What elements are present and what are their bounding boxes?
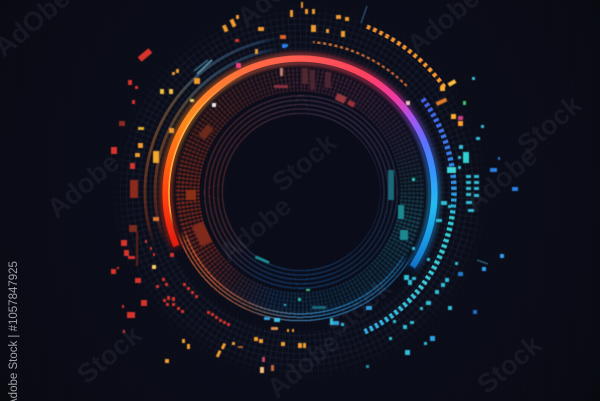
cool particles on the right [255, 44, 518, 368]
orange dashed arc outer [365, 24, 446, 88]
watermark: Adobe Stock repeated: Stock [321, 273, 397, 343]
inner dark disc [226, 115, 380, 269]
watermark: Adobe Stock repeated: Adobe [213, 191, 297, 268]
orange dashed arc inner [312, 40, 408, 88]
thin bottom rings [178, 230, 411, 322]
watermark: Adobe Stock repeated: Stock [511, 90, 587, 160]
segmented data band [172, 64, 428, 320]
ring inner highlight [168, 76, 243, 226]
blue and cyan segmented bars [362, 96, 457, 335]
outer grid ring [120, 12, 480, 372]
highlight glints [190, 6, 488, 264]
inner concentric thin rings [204, 94, 398, 290]
watermark: Adobe Stock repeated: Stock [471, 330, 547, 400]
main ring glow [156, 50, 444, 274]
watermark: Adobe Stock repeated: Adobe [41, 147, 125, 224]
glitch blocks in band [186, 68, 355, 247]
watermark: Adobe Stock repeated: Stock [266, 128, 342, 198]
watermark: Adobe Stock repeated: Adobe [459, 141, 543, 218]
main neon gradient ring [162, 55, 438, 269]
watermark: Adobe Stock repeated: Stock [71, 320, 147, 390]
left dim outer arcs [143, 38, 276, 242]
